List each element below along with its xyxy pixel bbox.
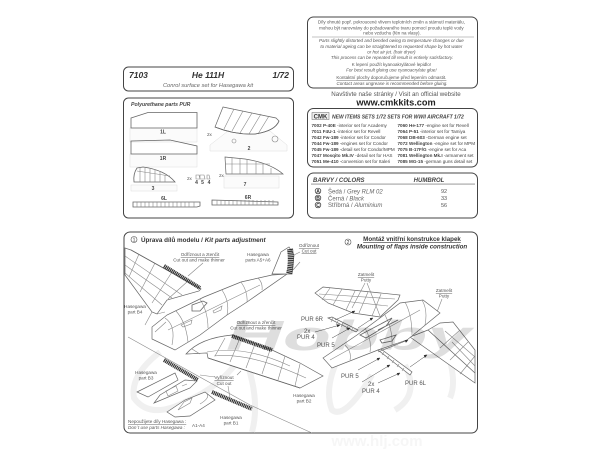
parts 4 5 4: 5 [201,180,204,186]
Hasegawa part B4 label: Hasegawa [124,304,146,309]
colors heading: BARVY / COLORS [313,178,365,184]
items right column: 7072 Wellington -engine set for MPM [398,141,475,146]
part 2: 2 [248,146,251,152]
step 2 heading: Mounting of flaps inside construction [357,244,467,250]
Hasegawa part B2 label: Hasegawa [293,393,315,398]
parts 4 5 4: 2x [187,176,193,181]
fuselage and wing right [323,300,475,383]
glue note: Kontaktní plochy doporučujeme před lepením odmastit. [336,75,446,80]
Hasegawa part B4 label: part B4 [128,310,143,314]
panel: new items [308,108,478,167]
part 3 [131,167,177,192]
step 2 heading: Montáž vnitřní konstrukce klapek [363,236,461,243]
panel: polyurethane parts [124,98,294,218]
cut-out label top [173,252,225,276]
cut-out label middle: Odříznout a zřenčit [237,320,276,325]
panel: colors [308,173,478,218]
parts heading: Polyurethane parts PUR [131,102,191,108]
part 7: 7 [244,182,247,188]
upper wing right [315,287,400,317]
part 6L: 6L [161,196,167,202]
Hasegawa part B1: part B1 [224,420,239,426]
part 2 [207,107,287,152]
step 2 heading [345,236,467,250]
glue note: Contact areas ungrease is recommended before gluing. [336,81,448,86]
part 2: 2x [207,132,213,137]
cut-out label lower: Vyříznout [214,375,234,380]
Hasegawa part B3: Hasegawa [135,370,157,375]
putty label 1: Putty [361,278,372,282]
note: do not use parts: Don´t use parts Hasegawa : [128,425,186,430]
putty label 2: Putty [439,294,450,298]
part 1R [130,140,197,167]
color C [315,202,447,209]
note: do not use parts: Nepoužijete díly Hasegawa : [128,419,186,424]
color B: B [316,196,320,202]
part 6L [133,196,200,207]
Hasegawa part B3: part B3 [139,376,154,380]
items right column: 7064 P-51 -interior set for Tamiya [398,129,465,134]
flap arrows [315,311,427,383]
Hasegawa part B1 [167,392,252,426]
CMK logo: CMK [314,114,328,120]
color A: Šedá / Grey RLM 02 [328,188,383,196]
part 6R [212,195,278,205]
color C: Stříbrná / Aluminium [328,203,382,209]
PUR labels: 2x [368,382,374,388]
part 3: 3 [152,186,155,192]
Czech note: nebo vzduchu (fén na vlasy). [363,30,421,36]
watermark word: Hobby [226,312,476,359]
panel: instructions note [308,17,478,88]
English note: to material ageing can be straightened to requested shape by hot water [320,44,463,49]
part 7: 2x [219,173,225,178]
Czech note: Díly ohnuté popř. pokroucené vlivem teplotních změn a stárnutí materiálu, [318,20,465,24]
glue note: K lepení použít kyanoakrylátové lepidlo! [352,62,431,67]
items right column: 7081 Wellington Mk.I -armament set [398,153,474,158]
CMK logo [312,112,329,120]
glue note: For best result gluing use cyanoacrylate glue! [346,68,437,72]
putty label 1 [352,272,380,316]
cut-out label top: Odříznout a ztenčit [181,252,220,257]
putty label 2: Zatmelit [436,288,453,293]
Hasegawa part B3 [135,360,198,403]
items right column: 7075 B-17F/G -engine set for Aca [398,147,466,152]
cut-out label lower [200,375,234,398]
items left column: 7002 P-40E -interior set for Academy [312,123,387,128]
fuselage left [152,247,300,350]
scale: 1/72 [272,70,289,80]
English note: or hot air jet. (hair dryer) [367,50,416,54]
website invitation: Navštivte naše stránky / Visit an official website [331,91,461,98]
English note: This process can be repeated till result is entirely satisfactory. [331,55,453,60]
items left column: 7044 Fw-189 -engines set for Condor [312,141,388,146]
PUR labels: PUR 6L [405,381,427,387]
set number: 7103 [129,70,148,80]
color C: C [316,203,320,209]
Hasegawa parts A5+A6 label: parts A5+A6 [245,258,271,262]
part 1L: 1L [160,130,166,136]
parts 4 5 4 [187,175,211,186]
items right column: 7068 DB-603 -German engine set [398,135,467,140]
PUR labels: 2x [304,329,310,335]
PUR labels: PUR 5 [317,343,335,349]
watermark script [134,345,453,432]
watermark url: www.hlj.com [330,433,423,450]
cut-out label fin: Odříznout [299,243,319,248]
subtitle: Conrol surface set for Hasegawa kit [163,83,253,89]
color C: 56 [441,203,447,209]
Czech note: mohou být narovnány do požadovaného tvaru pomocí proudu teplé vody [319,26,464,30]
new items heading: NEW ITEMS SETS 1/72 SETS FOR WWII AIRCRAFT 1/72 [332,114,464,120]
color B: 33 [441,196,447,202]
putty label 2 [436,288,453,312]
PUR labels: PUR 4 [362,389,380,395]
PUR labels: PUR 6R [301,317,324,323]
note: do not use parts: A1-A4 [192,423,205,428]
Hasegawa parts A5+A6 label: Hasegawa [247,252,269,257]
cut-out label top: Cut out and make thinner [173,258,225,262]
items left column: 7042 Fw-189 -interior set for Condor [312,135,386,140]
items left column: 7047 Mosqito Mk.IV -detail set for HAS [312,153,392,158]
part 6R: 6R [245,195,252,201]
color A [315,188,447,196]
parts 4 5 4: 4 [208,180,211,186]
part 1R: 1R [160,156,167,162]
part 7 [219,157,283,188]
website address: www.cmkkits.com [355,98,436,108]
items left column: 7045 Fw-189 -detail set for Condor/MPM [312,147,395,152]
parts 4 5 4: 4 [195,180,198,186]
items left column: 7011 F4U-1 -interior set for Revell [312,129,380,134]
color B: Černá / Black [328,196,365,202]
cut-out label fin: Cut out [302,248,317,254]
upper-left wing [125,248,201,325]
note: do not use parts [128,419,205,430]
PUR labels: PUR 5 [341,374,359,380]
color A: A [316,189,320,195]
cut-out label middle: Cut out and make thinner [230,326,282,330]
panel: title box [124,67,294,91]
Humbrol heading: HUMBROL [414,178,445,184]
putty label 1: Zatmelit [358,272,375,277]
color B [315,195,447,202]
step 2 heading: 2 [347,240,350,246]
items left column: 7051 Me-410 -conversion set for Italeri [312,159,390,164]
main lower wing left [128,335,323,433]
panel: assembly diagrams [124,232,478,433]
part 1L [130,112,197,142]
items right column: 7085 MG-15 -german guns detail set [398,159,472,164]
cut-out label middle [230,320,282,330]
PUR labels: PUR 4 [297,335,315,341]
color A: 92 [441,189,447,195]
items right column: 7060 He-177 -engine set for Revell [398,123,469,128]
Hasegawa part B2 label: part B2 [297,398,312,404]
Hasegawa part B1: Hasegawa [220,415,242,420]
step 1 heading: Úprava dílů modelu / Kit parts adjustment [141,235,266,244]
step 1 heading: 1 [133,238,136,244]
English note: Parts slightly distorted and bended owing to temperature changes or due [319,38,464,43]
cut-out label lower: Cut out [217,381,232,386]
model name: He 111H [192,70,225,80]
PUR labels [297,317,427,395]
